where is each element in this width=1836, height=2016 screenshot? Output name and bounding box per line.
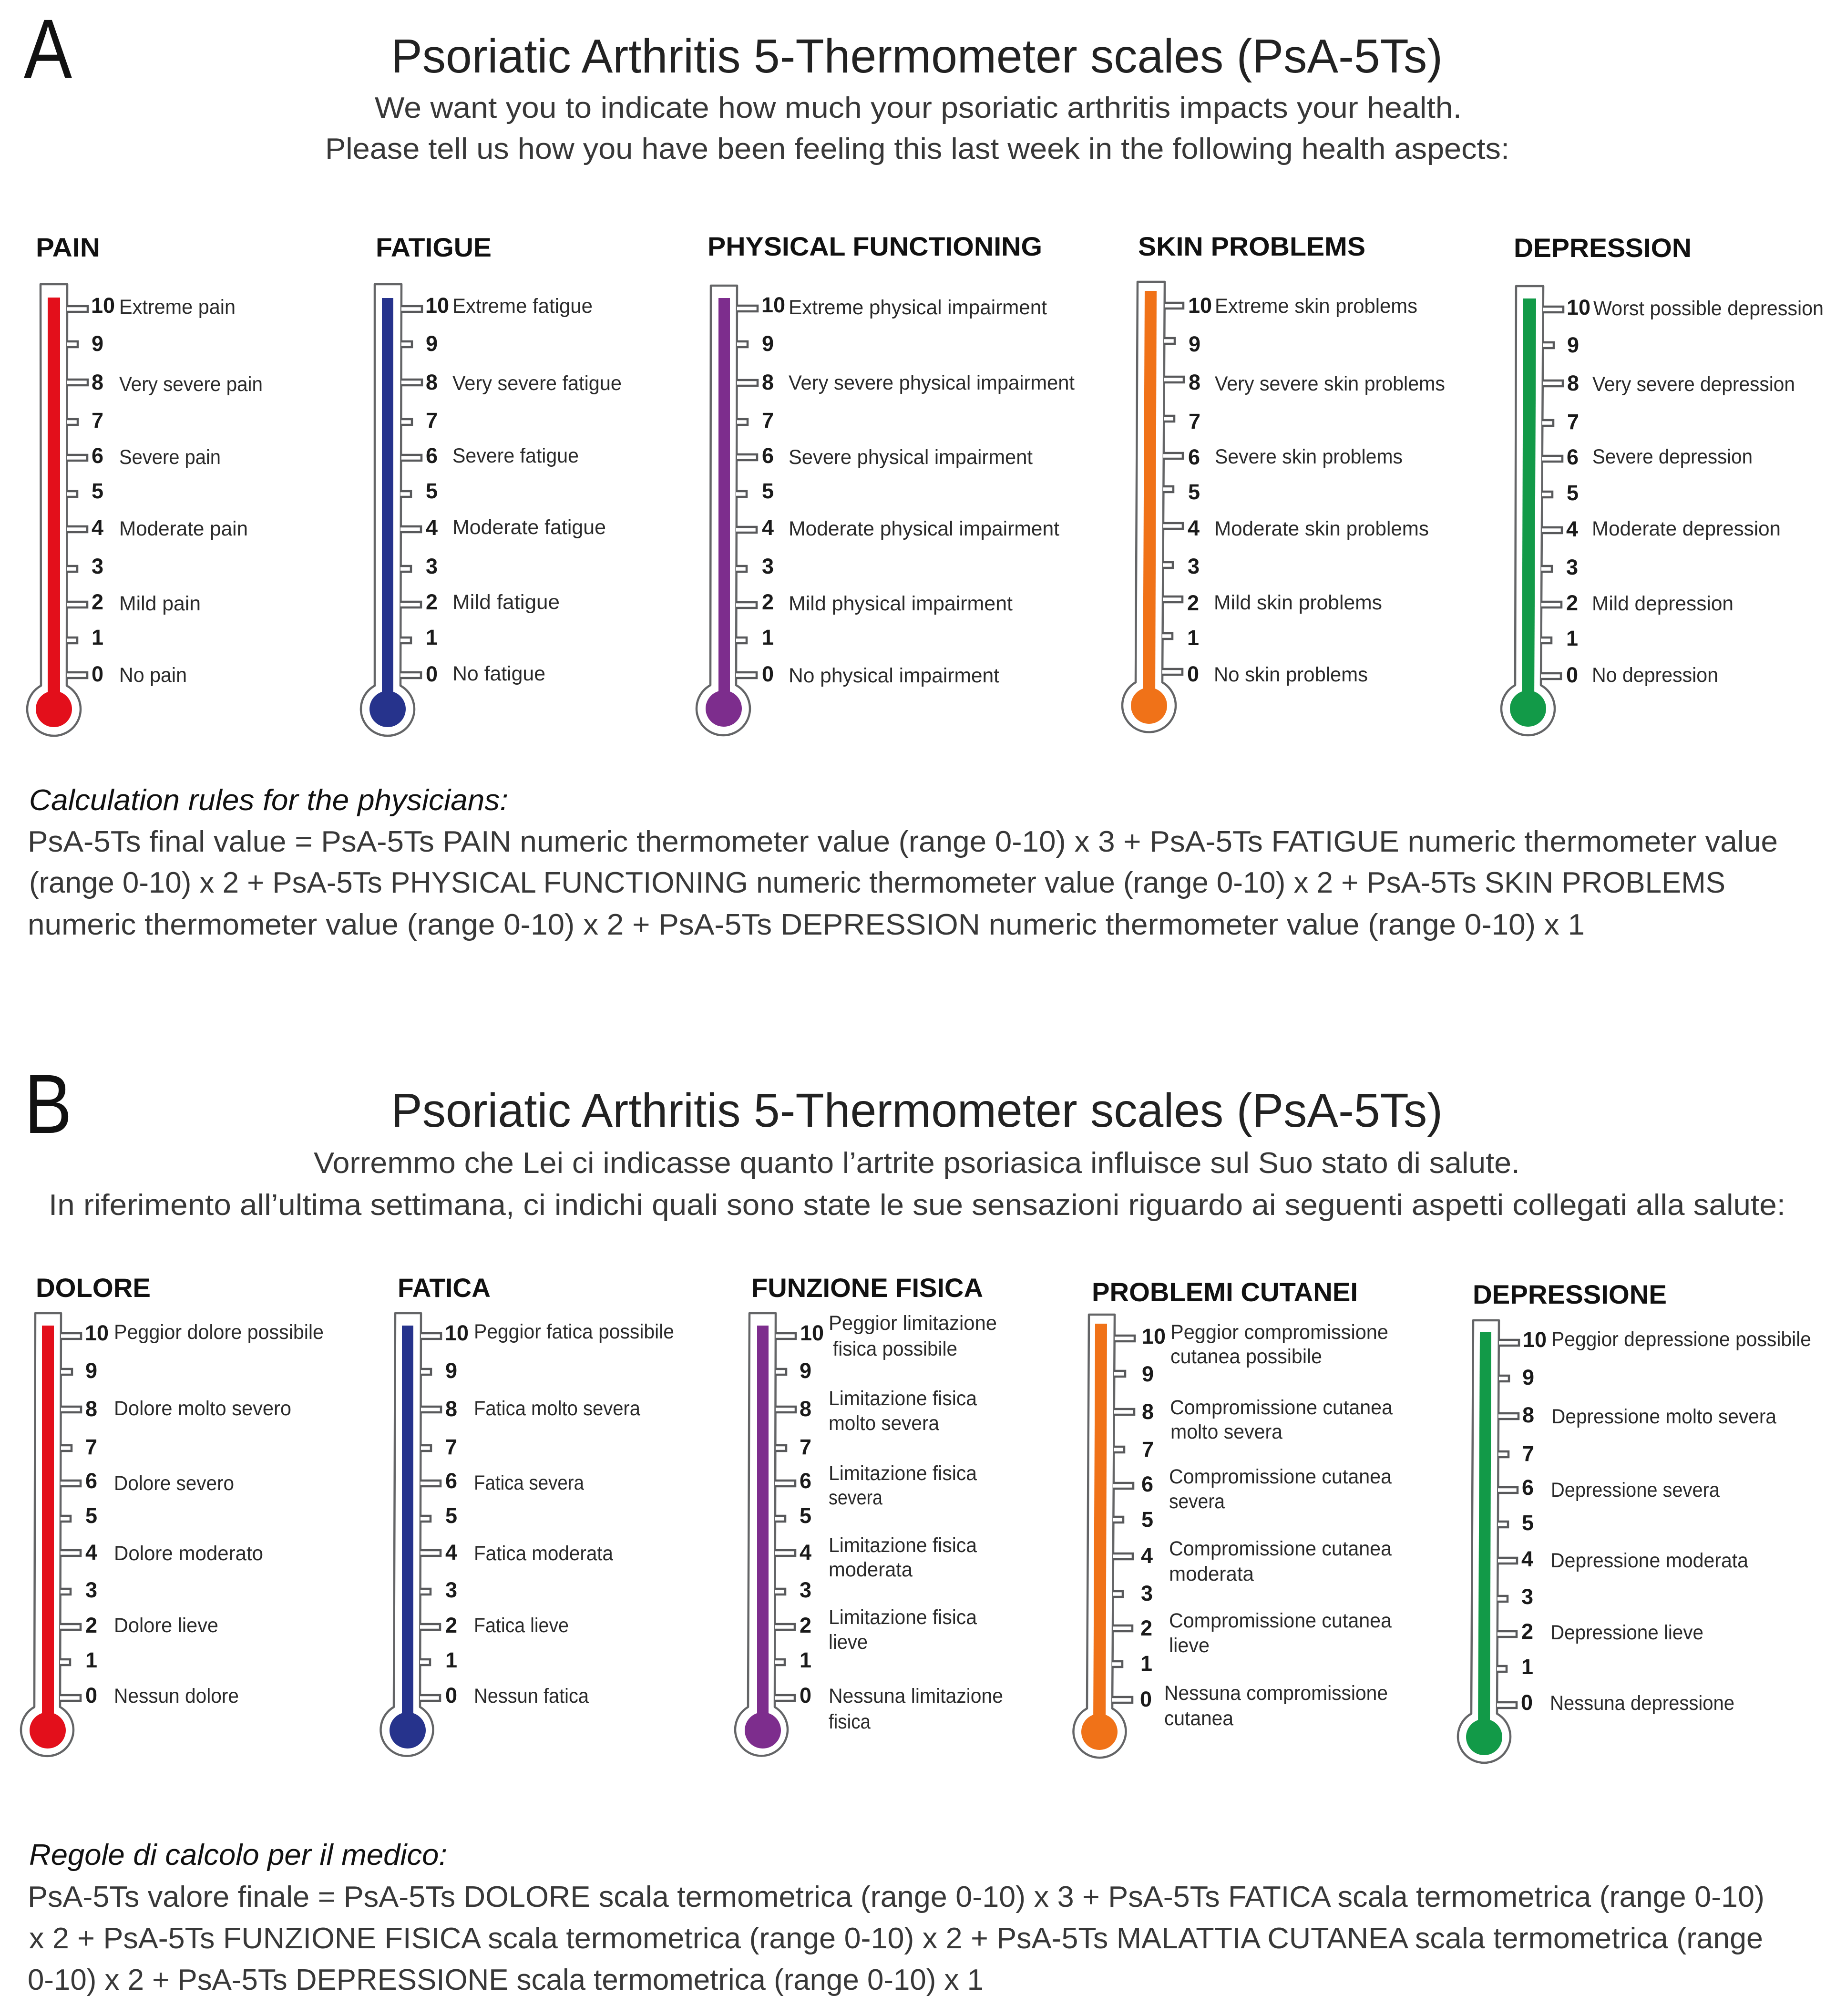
scale labels: Limitazione fisica [829, 1462, 977, 1485]
scale labels: Very severe skin problems [1215, 372, 1445, 395]
scale numbers: 1 [445, 1648, 457, 1672]
scale labels: Compromissione cutanea [1169, 1609, 1392, 1632]
scale numbers: 5 [1188, 480, 1200, 504]
heading: dolore: DOLORE [36, 1273, 151, 1303]
thermometer: physical functioning [697, 231, 1075, 735]
tick marks [400, 306, 422, 678]
tick marks [1162, 303, 1184, 675]
scale numbers: 2 [85, 1613, 97, 1637]
scale numbers: 6 [85, 1469, 97, 1493]
scale numbers: 0 [445, 1683, 457, 1707]
scale numbers: 5 [1141, 1507, 1153, 1532]
scale labels [1164, 1321, 1393, 1730]
scale numbers: 8 [445, 1397, 457, 1421]
thermometer: funzione fisica [735, 1273, 1003, 1756]
scale labels: lieve [829, 1631, 868, 1654]
scale numbers [1187, 293, 1212, 686]
calculation rules A: Calculation rules for the physicians: [29, 784, 508, 817]
scale labels: Worst possible depression [1593, 297, 1824, 320]
panel letter B: B [24, 1058, 72, 1151]
scale numbers: 5 [800, 1503, 811, 1528]
thermometer outline [697, 286, 750, 735]
scale numbers: 6 [426, 443, 438, 468]
scale numbers: 2 [426, 590, 438, 614]
scale labels: Moderate depression [1592, 517, 1781, 540]
scale numbers: 7 [445, 1435, 457, 1459]
mercury column and bulb [745, 1326, 781, 1749]
scale numbers: 7 [92, 408, 103, 432]
mercury column and bulb [1081, 1324, 1118, 1750]
tick marks [736, 306, 758, 678]
scale labels: Moderate pain [119, 517, 248, 540]
scale labels: cutanea possibile [1170, 1345, 1322, 1368]
tick marks [420, 1333, 441, 1701]
scale labels: Severe pain [119, 446, 221, 469]
scale numbers: 2 [445, 1613, 457, 1637]
scale labels: Depressione severa [1551, 1479, 1720, 1502]
thermometer outline [361, 284, 414, 736]
scale numbers: 4 [426, 515, 438, 540]
panel letter A: A [24, 2, 72, 96]
thermometer: problemi cutanei [1073, 1277, 1393, 1758]
title B: Psoriatic Arthritis 5-Thermometer scales (PsA-5Ts) [391, 1084, 1443, 1137]
scale numbers: 10 [1523, 1327, 1547, 1352]
thermometer: fatigue [361, 232, 622, 736]
scale labels [119, 296, 263, 687]
scale numbers: 7 [1522, 1441, 1534, 1466]
scale numbers: 3 [800, 1578, 811, 1602]
scale numbers: 4 [85, 1540, 97, 1564]
calculation rules A: PsA-5Ts final value = PsA-5Ts PAIN numeric thermometer value (range 0-10) x 3 + PsA-5Ts FATIGUE numeric thermometer value [28, 825, 1778, 858]
scale numbers: 2 [800, 1613, 811, 1637]
scale labels: Limitazione fisica [829, 1606, 977, 1629]
scale numbers: 6 [1141, 1472, 1153, 1496]
scale numbers: 10 [1567, 295, 1590, 319]
scale numbers: 3 [426, 554, 438, 578]
scale labels: Depressione molto severa [1551, 1405, 1776, 1428]
scale numbers: 4 [445, 1540, 457, 1564]
scale labels: Extreme pain [119, 296, 236, 319]
scale numbers: 9 [85, 1358, 97, 1383]
scale numbers: 3 [92, 554, 103, 578]
scale labels: No physical impairment [789, 664, 999, 687]
thermometer: dolore [21, 1273, 324, 1756]
scale numbers: 3 [762, 554, 774, 578]
scale numbers: 5 [426, 479, 438, 503]
scale numbers: 3 [1141, 1581, 1153, 1605]
heading: problemi cutanei: PROBLEMI CUTANEI [1092, 1277, 1358, 1307]
scale numbers: 5 [445, 1503, 457, 1528]
scale numbers: 9 [445, 1358, 457, 1383]
mercury column and bulb [390, 1326, 426, 1749]
scale numbers: 3 [445, 1578, 457, 1602]
scale numbers: 7 [1189, 409, 1200, 433]
heading: depressione: DEPRESSIONE [1473, 1279, 1667, 1309]
scale numbers: 6 [92, 443, 103, 468]
scale numbers: 10 [1188, 293, 1212, 318]
scale labels [829, 1312, 1003, 1733]
scale numbers: 3 [1521, 1584, 1533, 1609]
intro text A: Please tell us how you have been feeling this last week in the following health aspects: [325, 133, 1509, 165]
scale numbers: 6 [445, 1469, 457, 1493]
scale numbers: 9 [426, 331, 438, 356]
scale labels [452, 295, 622, 685]
scale labels: Dolore moderato [114, 1542, 263, 1565]
scale numbers [1140, 1324, 1166, 1711]
thermometer: fatica [380, 1273, 674, 1756]
scale labels: Severe depression [1592, 445, 1753, 468]
thermometer: pain [27, 232, 263, 736]
scale numbers: 5 [85, 1503, 97, 1528]
scale numbers: 9 [1189, 332, 1200, 356]
heading: funzione fisica: FUNZIONE FISICA [751, 1273, 983, 1303]
scale numbers: 3 [85, 1578, 97, 1602]
scale numbers: 8 [426, 370, 438, 394]
scale labels: Depressione moderata [1550, 1549, 1748, 1572]
scale labels: Peggior dolore possibile [114, 1321, 324, 1344]
scale numbers: 0 [92, 662, 103, 686]
scale numbers: 10 [1142, 1324, 1166, 1348]
scale labels: Nessuna compromissione [1164, 1682, 1388, 1705]
mercury column and bulb [1510, 298, 1546, 727]
scale numbers: 4 [1566, 517, 1578, 541]
scale numbers: 1 [1566, 626, 1578, 650]
scale labels: fisica [829, 1710, 871, 1733]
scale numbers [445, 1321, 469, 1707]
scale numbers: 8 [1522, 1403, 1534, 1427]
scale numbers: 4 [1188, 516, 1200, 540]
scale numbers: 9 [1522, 1365, 1534, 1389]
scale numbers: 7 [1142, 1437, 1154, 1461]
scale labels: Compromissione cutanea [1169, 1465, 1392, 1488]
calculation rules A [28, 784, 1778, 941]
scale labels: Dolore molto severo [114, 1397, 291, 1420]
scale numbers: 0 [85, 1683, 97, 1707]
title A: Psoriatic Arthritis 5-Thermometer scales (PsA-5Ts) [391, 30, 1443, 83]
scale labels: Limitazione fisica [829, 1534, 977, 1557]
scale labels [1550, 1328, 1811, 1715]
scale labels: Fatica moderata [474, 1542, 613, 1565]
scale labels: cutanea [1164, 1707, 1233, 1730]
scale labels: Severe physical impairment [789, 446, 1033, 469]
calculation rules B: x 2 + PsA-5Ts FUNZIONE FISICA scala termometrica (range 0-10) x 2 + PsA-5Ts MALATTIA CUTANEA scala termometrica (range [29, 1922, 1763, 1955]
tick marks [67, 306, 88, 678]
scale labels: Moderate fatigue [452, 516, 606, 539]
scale labels: Mild physical impairment [789, 592, 1013, 615]
scale labels: Nessun fatica [474, 1685, 589, 1707]
scale numbers: 10 [761, 293, 785, 317]
scale labels: Fatica severa [474, 1471, 584, 1494]
scale labels: Peggior depressione possibile [1551, 1328, 1811, 1351]
scale numbers: 1 [1521, 1655, 1533, 1679]
scale numbers: 10 [425, 293, 449, 318]
scale labels: Severe fatigue [452, 444, 579, 467]
scale numbers: 6 [762, 443, 774, 468]
scale labels: Extreme physical impairment [789, 296, 1047, 319]
scale labels: Extreme fatigue [452, 295, 593, 318]
scale numbers: 4 [92, 515, 103, 540]
mercury column and bulb [36, 298, 72, 727]
scale labels: Dolore severo [114, 1472, 234, 1495]
scale labels: No fatigue [452, 662, 545, 685]
scale numbers [425, 293, 449, 686]
scale numbers: 1 [1187, 626, 1199, 650]
scale numbers: 2 [92, 590, 103, 614]
scale labels [1592, 297, 1824, 687]
panel A: English thermometer scales [24, 2, 1824, 941]
scale labels: Fatica molto severa [474, 1397, 640, 1420]
calculation rules A: numeric thermometer value (range 0-10) x 2 + PsA-5Ts DEPRESSION numeric thermometer value (range 0-10) x 1 [28, 908, 1585, 941]
scale labels: severa [829, 1486, 882, 1509]
scale labels: Very severe fatigue [452, 372, 622, 395]
intro text A: We want you to indicate how much your psoriatic arthritis impacts your health. [375, 92, 1462, 124]
scale labels: molto severa [1170, 1420, 1282, 1443]
calculation rules B: PsA-5Ts valore finale = PsA-5Ts DOLORE scala termometrica (range 0-10) x 3 + PsA-5Ts FATICA scala termometrica (range 0-10) [28, 1881, 1764, 1913]
scale numbers: 7 [1567, 410, 1579, 434]
scale numbers: 8 [1189, 370, 1200, 394]
tick marks [1497, 1340, 1519, 1708]
heading: pain: PAIN [36, 232, 100, 262]
scale labels: lieve [1169, 1634, 1210, 1657]
scale numbers: 7 [426, 408, 438, 432]
scale labels: No depression [1592, 664, 1718, 687]
scale numbers: 5 [1522, 1511, 1534, 1535]
scale labels [114, 1321, 324, 1707]
scale labels [789, 296, 1075, 687]
calculation rules B: Regole di calcolo per il medico: [29, 1839, 447, 1872]
scale labels: Moderate physical impairment [789, 517, 1059, 540]
scale numbers [1521, 1327, 1547, 1715]
scale numbers: 6 [1567, 445, 1579, 469]
tick marks [1112, 1336, 1135, 1703]
scale numbers: 0 [800, 1683, 811, 1707]
scale numbers: 8 [1567, 371, 1579, 395]
thermometer outline [1122, 282, 1176, 732]
thermometer outline [1501, 286, 1555, 735]
heading: depression: DEPRESSION [1514, 233, 1692, 263]
scale numbers: 8 [800, 1397, 811, 1421]
scale labels: Depressione lieve [1550, 1621, 1703, 1644]
scale labels: moderata [1169, 1563, 1254, 1585]
scale labels: Peggior fatica possibile [474, 1320, 674, 1343]
scale numbers: 7 [800, 1435, 811, 1459]
scale numbers: 0 [426, 662, 438, 686]
scale numbers: 1 [85, 1648, 97, 1672]
scale labels: Limitazione fisica [829, 1387, 977, 1410]
mercury column and bulb [1131, 291, 1167, 724]
mercury column and bulb [706, 298, 742, 727]
thermometer outline [380, 1313, 433, 1756]
scale numbers: 3 [1566, 555, 1578, 579]
scale numbers [91, 293, 115, 686]
thermometer outline [1073, 1315, 1126, 1758]
scale numbers: 4 [800, 1540, 811, 1564]
scale numbers: 1 [762, 625, 774, 649]
scale numbers: 5 [92, 479, 103, 503]
scale labels: severa [1169, 1490, 1225, 1513]
scale labels: Nessuna limitazione [829, 1685, 1003, 1707]
scale labels: Very severe physical impairment [789, 371, 1075, 394]
thermometer outline [21, 1313, 73, 1756]
scale numbers: 9 [800, 1358, 811, 1383]
scale numbers: 7 [85, 1435, 97, 1459]
scale numbers: 8 [762, 370, 774, 394]
scale labels: Very severe depression [1592, 373, 1795, 396]
scale numbers: 2 [1187, 591, 1199, 615]
scale labels: Mild pain [119, 592, 201, 615]
heading: skin problems: SKIN PROBLEMS [1138, 231, 1365, 261]
scale numbers: 10 [85, 1321, 109, 1345]
scale numbers: 2 [762, 590, 774, 614]
scale numbers: 6 [1188, 445, 1200, 469]
scale labels: Fatica lieve [474, 1614, 569, 1637]
scale numbers: 1 [426, 625, 438, 649]
scale labels: Severe skin problems [1215, 445, 1403, 468]
scale numbers: 8 [85, 1397, 97, 1421]
scale labels: molto severa [829, 1412, 939, 1435]
scale numbers: 5 [1567, 481, 1579, 505]
tick marks [1541, 307, 1563, 679]
scale labels: Dolore lieve [114, 1614, 218, 1637]
scale numbers: 8 [1142, 1399, 1154, 1424]
thermometer outline [735, 1313, 788, 1756]
scale numbers [800, 1321, 824, 1707]
scale labels: No pain [119, 664, 187, 687]
calculation rules A: (range 0-10) x 2 + PsA-5Ts PHYSICAL FUNCTIONING numeric thermometer value (range 0-10) x 2 + PsA-5Ts SKIN PROBLEMS [29, 866, 1725, 899]
scale labels: Moderate skin problems [1214, 517, 1429, 540]
scale labels [474, 1320, 674, 1707]
scale labels: Compromissione cutanea [1170, 1396, 1393, 1419]
scale numbers: 1 [800, 1648, 811, 1672]
scale labels: Extreme skin problems [1215, 295, 1417, 318]
heading: physical functioning: PHYSICAL FUNCTIONING [708, 231, 1042, 261]
tick marks [60, 1333, 81, 1701]
scale numbers: 0 [1140, 1687, 1152, 1711]
scale numbers: 9 [1567, 333, 1579, 357]
scale numbers: 0 [762, 662, 774, 686]
scale labels: Nessuna depressione [1550, 1692, 1734, 1715]
panel B: Italian thermometer scales [21, 1058, 1811, 1996]
scale numbers: 2 [1566, 591, 1578, 615]
scale labels: Peggior compromissione [1170, 1321, 1388, 1344]
mercury column and bulb [1466, 1332, 1502, 1755]
mercury column and bulb [30, 1326, 66, 1749]
scale numbers: 10 [800, 1321, 824, 1345]
thermometer: skin problems [1122, 231, 1445, 732]
scale labels: Mild depression [1592, 592, 1733, 615]
scale numbers [85, 1321, 109, 1707]
mercury column and bulb [369, 298, 406, 727]
scale numbers: 6 [800, 1469, 811, 1493]
scale labels: Mild skin problems [1214, 591, 1382, 614]
scale numbers: 8 [92, 370, 103, 394]
scale labels: fisica possibile [833, 1337, 957, 1360]
thermometer outline [27, 284, 81, 736]
scale numbers: 4 [1141, 1543, 1153, 1568]
thermometer: depressione [1458, 1279, 1811, 1763]
scale numbers: 0 [1521, 1690, 1533, 1715]
scale labels: Mild fatigue [452, 591, 560, 614]
scale numbers: 0 [1566, 663, 1578, 687]
scale labels: Nessun dolore [114, 1685, 239, 1707]
scale labels [1214, 295, 1445, 686]
scale labels: Very severe pain [119, 373, 263, 396]
scale numbers: 1 [1140, 1651, 1152, 1676]
scale numbers: 2 [1521, 1619, 1533, 1644]
scale labels: Peggior limitazione [829, 1312, 997, 1335]
scale numbers: 5 [762, 479, 774, 503]
calculation rules B: 0-10) x 2 + PsA-5Ts DEPRESSIONE scala termometrica (range 0-10) x 1 [28, 1964, 984, 1996]
scale numbers: 9 [92, 331, 103, 356]
scale numbers: 10 [91, 293, 115, 318]
intro text B: Vorremmo che Lei ci indicasse quanto l’artrite psoriasica influisce sul Suo stato di salute. [314, 1147, 1520, 1180]
scale numbers: 4 [1521, 1547, 1533, 1571]
heading: fatigue: FATIGUE [376, 232, 492, 262]
thermometer: depression [1501, 233, 1824, 735]
intro text B: In riferimento all’ultima settimana, ci indichi quali sono state le sue sensazioni riguardo ai seguenti aspetti collegati alla salute: [49, 1189, 1785, 1222]
intro text B [49, 1147, 1785, 1222]
scale numbers: 6 [1522, 1475, 1534, 1500]
scale labels: moderata [829, 1558, 913, 1581]
scale numbers [761, 293, 785, 686]
scale labels: Compromissione cutanea [1169, 1537, 1392, 1560]
scale labels: No skin problems [1214, 663, 1368, 686]
scale numbers: 4 [762, 515, 774, 540]
thermometer outline [1458, 1320, 1510, 1763]
scale numbers: 0 [1187, 662, 1199, 686]
scale numbers: 7 [762, 408, 774, 432]
scale numbers: 2 [1140, 1616, 1152, 1640]
tick marks [775, 1333, 796, 1701]
scale numbers: 3 [1188, 554, 1200, 578]
scale numbers: 9 [1142, 1362, 1154, 1386]
heading: fatica: FATICA [398, 1273, 491, 1303]
intro text A [325, 92, 1509, 165]
scale numbers [1566, 295, 1590, 687]
scale numbers: 9 [762, 331, 774, 356]
scale numbers: 1 [92, 625, 103, 649]
calculation rules B [28, 1839, 1764, 1996]
scale numbers: 10 [445, 1321, 469, 1345]
